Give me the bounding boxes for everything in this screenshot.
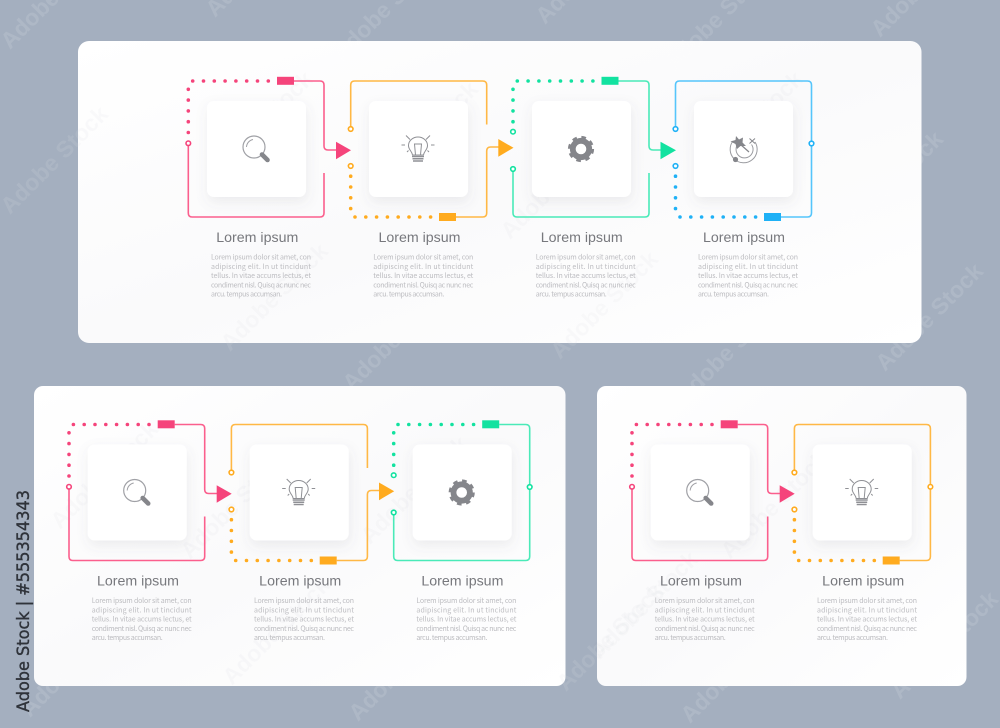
blue connector [673, 81, 814, 221]
body text: tellus. In vitae accums lectus, et [698, 271, 798, 281]
title: Lorem ipsum [216, 230, 298, 246]
step 3: gear (three-step) [391, 420, 532, 643]
body text: adipiscing elit. In ut tincidunt [373, 262, 474, 272]
watermarks on background and panels: Adobe Stock [690, 66, 808, 184]
icon: target with dart [730, 136, 757, 163]
step 2: idea (top) [348, 81, 514, 300]
body text: adipiscing elit. In ut tincidunt [536, 262, 636, 272]
body text: tellus. In vitae accums lectus, et [92, 615, 192, 625]
body text: condiment nisl. Quisq ac nunc nec [373, 280, 474, 290]
watermarks on background and panels: Adobe Stock [217, 572, 335, 690]
watermarks on background and panels: Adobe Stock [495, 126, 613, 244]
title: Lorem ipsum [421, 574, 503, 590]
pink connector [186, 77, 351, 217]
body text [416, 596, 517, 643]
body text [373, 252, 474, 300]
icon: gear [570, 138, 592, 160]
card [532, 101, 631, 197]
watermarks on background and panels: Adobe Stock [585, 546, 703, 664]
body text: condiment nisl. Quisq ac nunc nec [92, 624, 192, 634]
step 4: target (top) [673, 81, 814, 300]
body text [211, 252, 311, 300]
title: Lorem ipsum [97, 574, 179, 590]
card [694, 101, 793, 197]
title: Lorem ipsum [378, 230, 461, 246]
watermarks on background and panels: Adobe Stock [15, 604, 133, 722]
orange connector [792, 424, 933, 564]
group: top panel steps [186, 77, 814, 300]
title: Lorem ipsum [822, 574, 904, 590]
watermarks on background and panels: Adobe Stock [200, 66, 318, 184]
step 2: idea (two-step) [792, 424, 933, 643]
card [651, 444, 750, 540]
panel: three-step card [34, 386, 566, 686]
icon: light bulb [845, 479, 878, 504]
watermarks on background and panels: Adobe Stock [715, 446, 833, 564]
body text: Lorem ipsum dolor sit amet, con [373, 252, 473, 262]
icon: gear [450, 481, 473, 504]
body text: Lorem ipsum dolor sit amet, con [655, 596, 755, 606]
body text: arcu. tempus accumsan. [416, 633, 487, 643]
watermarks on background and panels: Adobe Stock [870, 258, 988, 376]
pink connector [630, 420, 795, 560]
card [207, 101, 306, 197]
icon: light bulb [282, 479, 315, 504]
watermarks on background and panels: Adobe Stock [175, 446, 293, 564]
body text: condiment nisl. Quisq ac nunc nec [698, 280, 798, 290]
watermarks on background and panels: Adobe Stock [215, 238, 333, 356]
body text: adipiscing elit. In ut tincidunt [817, 605, 917, 615]
watermarks on background and panels: Adobe Stock [670, 291, 788, 409]
body text [817, 596, 917, 643]
watermarks on background and panels: Adobe Stock [365, 76, 483, 194]
body text [698, 252, 798, 300]
body text [254, 596, 354, 643]
title: Lorem ipsum [703, 230, 785, 246]
icon: magnifier [687, 480, 711, 504]
body text: Lorem ipsum dolor sit amet, con [817, 596, 917, 606]
body text: condiment nisl. Quisq ac nunc nec [416, 624, 517, 634]
body text: arcu. tempus accumsan. [92, 633, 163, 643]
body text [536, 252, 636, 300]
stock id label: Adobe Stock | #555354343 [14, 490, 34, 712]
body text: arcu. tempus accumsan. [655, 633, 726, 643]
body text: Lorem ipsum dolor sit amet, con [536, 252, 636, 262]
card [813, 444, 912, 540]
body text: arcu. tempus accumsan. [254, 633, 325, 643]
body text: Lorem ipsum dolor sit amet, con [92, 596, 192, 606]
watermarks on background and panels: Adobe Stock [215, 238, 333, 356]
body text: adipiscing elit. In ut tincidunt [92, 605, 192, 615]
body text: adipiscing elit. In ut tincidunt [416, 605, 517, 615]
group: lower right panel steps [630, 420, 933, 643]
watermarks on background and panels: Adobe Stock [675, 610, 793, 728]
orange connector [348, 81, 514, 221]
card [88, 444, 187, 540]
green connector [511, 77, 676, 217]
body text: adipiscing elit. In ut tincidunt [211, 262, 311, 272]
body text: tellus. In vitae accums lectus, et [373, 271, 474, 281]
icon: light bulb [402, 136, 434, 161]
body text: arcu. tempus accumsan. [817, 633, 888, 643]
watermarks on background and panels: Adobe Stock [545, 246, 663, 364]
step 2: idea (three-step) [229, 424, 394, 643]
body text [92, 596, 192, 643]
body text: tellus. In vitae accums lectus, et [655, 615, 755, 625]
watermarks on background and panels: Adobe Stock [337, 278, 455, 396]
body text: arcu. tempus accumsan. [211, 290, 282, 300]
body text: condiment nisl. Quisq ac nunc nec [536, 280, 636, 290]
panel: two-step card [597, 386, 966, 686]
body text: adipiscing elit. In ut tincidunt [698, 262, 798, 272]
body text: Lorem ipsum dolor sit amet, con [698, 252, 798, 262]
body text: Lorem ipsum dolor sit amet, con [416, 596, 516, 606]
watermarks on background and panels: Adobe Stock [885, 586, 1000, 704]
watermarks on background and panels: Adobe Stock [217, 572, 335, 690]
watermarks on background and panels: Adobe Stock [355, 431, 473, 549]
body text: Lorem ipsum dolor sit amet, con [254, 596, 354, 606]
green connector [391, 420, 532, 560]
body text: tellus. In vitae accums lectus, et [211, 271, 311, 281]
watermarks on background and panels: Adobe Stock [545, 246, 663, 364]
body text: arcu. tempus accumsan. [536, 290, 607, 300]
title: Lorem ipsum [660, 574, 742, 590]
watermarks on background and panels: Adobe Stock [830, 126, 948, 244]
card [413, 444, 512, 540]
watermarks on background and panels: Adobe Stock [45, 416, 163, 534]
body text: tellus. In vitae accums lectus, et [536, 271, 636, 281]
icon: magnifier [124, 480, 148, 504]
body text: tellus. In vitae accums lectus, et [254, 615, 354, 625]
title: Lorem ipsum [541, 230, 623, 246]
orange connector [229, 424, 394, 564]
card [369, 101, 468, 197]
body text: condiment nisl. Quisq ac nunc nec [211, 280, 311, 290]
card [250, 444, 349, 540]
watermarks on background and panels: Adobe Stock [551, 578, 669, 696]
body text: arcu. tempus accumsan. [373, 290, 444, 300]
body text: condiment nisl. Quisq ac nunc nec [817, 624, 917, 634]
step 1: search (top) [186, 77, 351, 300]
step 3: gear (top) [511, 77, 676, 300]
body text: tellus. In vitae accums lectus, et [416, 615, 517, 625]
body text: adipiscing elit. In ut tincidunt [655, 605, 755, 615]
icon: magnifier [243, 136, 268, 160]
step 1: search (three-step) [67, 420, 232, 643]
panel: four-step card [78, 41, 922, 343]
body text: condiment nisl. Quisq ac nunc nec [655, 624, 755, 634]
body text: arcu. tempus accumsan. [698, 290, 769, 300]
body text: Lorem ipsum dolor sit amet, con [211, 252, 311, 262]
watermarks on background and panels: Adobe Stock [551, 578, 669, 696]
watermarks on background and panels: Adobe Stock [343, 608, 461, 726]
title: Lorem ipsum [259, 574, 341, 590]
pink connector [67, 420, 232, 560]
body text: adipiscing elit. In ut tincidunt [254, 605, 354, 615]
body text: condiment nisl. Quisq ac nunc nec [254, 624, 354, 634]
step 1: search (two-step) [630, 420, 795, 643]
group: lower left panel steps [67, 420, 532, 643]
body text [655, 596, 755, 643]
body text: tellus. In vitae accums lectus, et [817, 615, 917, 625]
